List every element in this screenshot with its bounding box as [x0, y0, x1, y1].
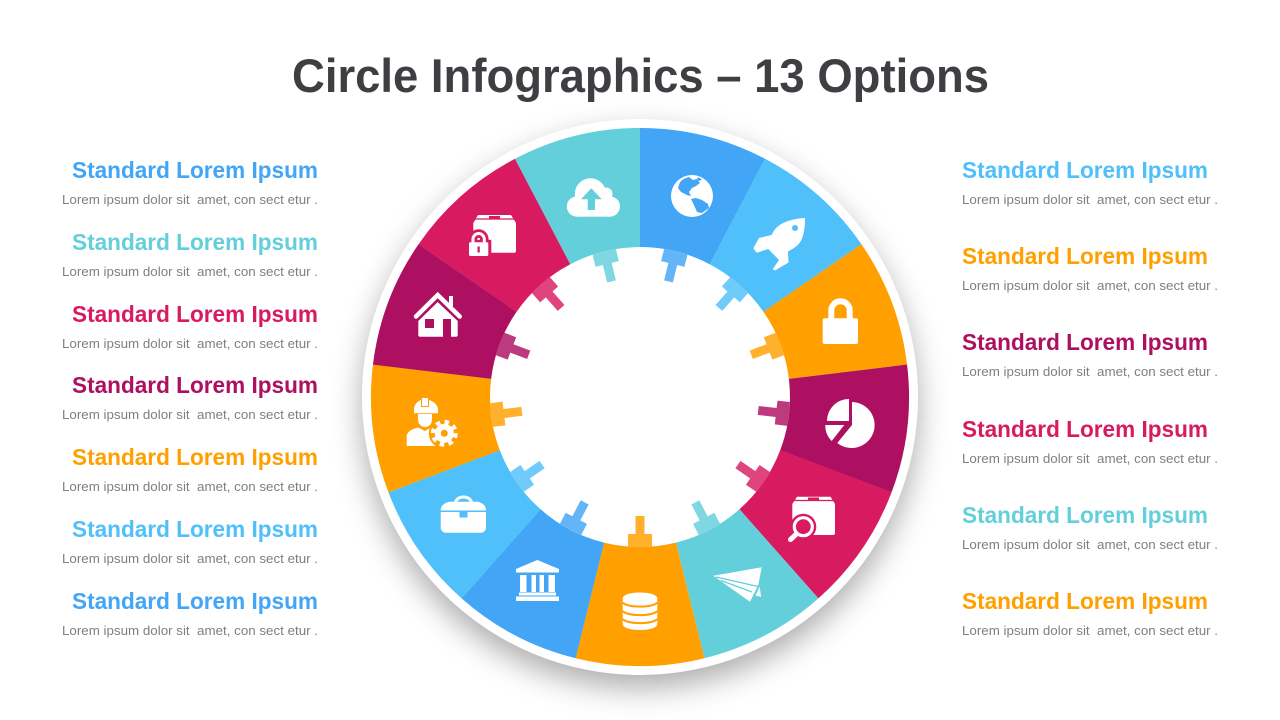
- text block: left item 7: Standard Lorem Ipsum: [72, 588, 318, 614]
- icon: rocket: [753, 218, 805, 270]
- peg 10: [490, 399, 523, 427]
- text block: right item 1: Lorem ipsum dolor sit amet, con sect etur .: [962, 193, 1218, 207]
- icon: house: [416, 295, 460, 337]
- icon: padlock: [823, 301, 858, 344]
- peg 5: [731, 455, 770, 492]
- text block: left item 7: Lorem ipsum dolor sit amet, con sect etur .: [62, 624, 318, 638]
- peg 11: [496, 333, 533, 366]
- segment 8 blue: [458, 496, 629, 665]
- peg 6: [685, 497, 720, 535]
- circle shadow: [362, 132, 918, 688]
- icon: database: [623, 592, 657, 630]
- text block: right item 4: [962, 416, 1218, 466]
- text block: left item 6: Lorem ipsum dolor sit amet, con sect etur .: [62, 552, 318, 566]
- text block: left item 5: Lorem ipsum dolor sit amet, con sect etur .: [62, 480, 318, 494]
- icon: toolbox: [441, 497, 486, 533]
- text block: left item 2: [62, 229, 318, 279]
- inner connector pegs: [490, 249, 790, 547]
- text block: right item 2: Lorem ipsum dolor sit amet, con sect etur .: [962, 279, 1218, 293]
- text block: left item 1: Standard Lorem Ipsum: [72, 157, 318, 183]
- text block: left item 2: Standard Lorem Ipsum: [72, 229, 318, 255]
- text block: right item 3: Standard Lorem Ipsum: [962, 329, 1208, 355]
- text block: left item 5: Standard Lorem Ipsum: [72, 444, 318, 470]
- peg 7: [628, 516, 652, 547]
- segment 11 purple: [366, 241, 527, 406]
- peg 4: [757, 399, 790, 426]
- peg 2: [710, 277, 748, 316]
- segment 1 blue: [612, 120, 767, 271]
- text block: left item 6: Standard Lorem Ipsum: [72, 516, 318, 542]
- text block: right item 5: Standard Lorem Ipsum: [962, 502, 1208, 528]
- peg 9: [510, 455, 549, 492]
- panel: circle diagram: [362, 119, 918, 688]
- icon: paper plane: [713, 567, 762, 602]
- text block: right item 3: Lorem ipsum dolor sit amet, con sect etur .: [962, 365, 1218, 379]
- segment 5 pink: [723, 427, 898, 603]
- text block: left item 1: [62, 157, 318, 207]
- text block: right item 6: [962, 588, 1218, 638]
- panel: left text column: [62, 157, 318, 638]
- peg 3: [747, 333, 784, 366]
- text block: left item 5: [62, 444, 318, 494]
- text block: right item 6: Standard Lorem Ipsum: [962, 588, 1208, 614]
- icon: cloud upload: [567, 178, 620, 217]
- text block: left item 4: Lorem ipsum dolor sit amet, con sect etur .: [62, 408, 318, 422]
- peg 13: [592, 249, 623, 284]
- text block: right item 4: Lorem ipsum dolor sit amet, con sect etur .: [962, 452, 1218, 466]
- text block: left item 1: Lorem ipsum dolor sit amet, con sect etur .: [62, 193, 318, 207]
- text block: left item 4: Standard Lorem Ipsum: [72, 372, 318, 398]
- peg 12: [532, 277, 570, 316]
- icon: bank: [516, 560, 559, 601]
- text block: left item 6: [62, 516, 318, 566]
- icon: globe: [671, 175, 713, 217]
- peg 8: [560, 497, 595, 535]
- text block: right item 1: [962, 157, 1218, 207]
- text block: right item 2: Standard Lorem Ipsum: [962, 243, 1208, 269]
- icon: box with padlock: [466, 215, 516, 258]
- segment 9 light blue: [382, 427, 557, 603]
- icon: box with magnifier: [790, 497, 835, 540]
- text block: right item 3: [962, 329, 1218, 379]
- segment 4 purple: [777, 351, 915, 493]
- text block: right item 2: [962, 243, 1218, 293]
- segment 6 teal: [651, 496, 822, 665]
- text block: right item 4: Standard Lorem Ipsum: [962, 416, 1208, 442]
- segment 13 teal: [513, 120, 668, 271]
- segments ring: [365, 120, 915, 666]
- text block: right item 6: Lorem ipsum dolor sit amet, con sect etur .: [962, 624, 1218, 638]
- panel: right text column: [962, 157, 1218, 638]
- text block: left item 3: Standard Lorem Ipsum: [72, 301, 318, 327]
- segment 2 light blue: [688, 153, 867, 331]
- icon: worker with gear: [407, 398, 460, 449]
- icon: pie chart: [825, 399, 875, 448]
- peg 1: [657, 249, 688, 284]
- segment 10 orange: [365, 351, 503, 493]
- text block: left item 4: [62, 372, 318, 422]
- segment 7 orange: [576, 543, 704, 666]
- text block: right item 5: Lorem ipsum dolor sit amet, con sect etur .: [962, 538, 1218, 552]
- white outer ring: [362, 119, 918, 675]
- text block: left item 3: [62, 301, 318, 351]
- title: Circle Infographics – 13 Options: [292, 49, 989, 102]
- text block: left item 3: Lorem ipsum dolor sit amet, con sect etur .: [62, 337, 318, 351]
- segment 3 orange: [753, 241, 914, 406]
- text block: right item 1: Standard Lorem Ipsum: [962, 157, 1208, 183]
- text block: left item 7: [62, 588, 318, 638]
- text block: right item 5: [962, 502, 1218, 552]
- text block: left item 2: Lorem ipsum dolor sit amet, con sect etur .: [62, 265, 318, 279]
- segment 12 pink: [413, 153, 592, 331]
